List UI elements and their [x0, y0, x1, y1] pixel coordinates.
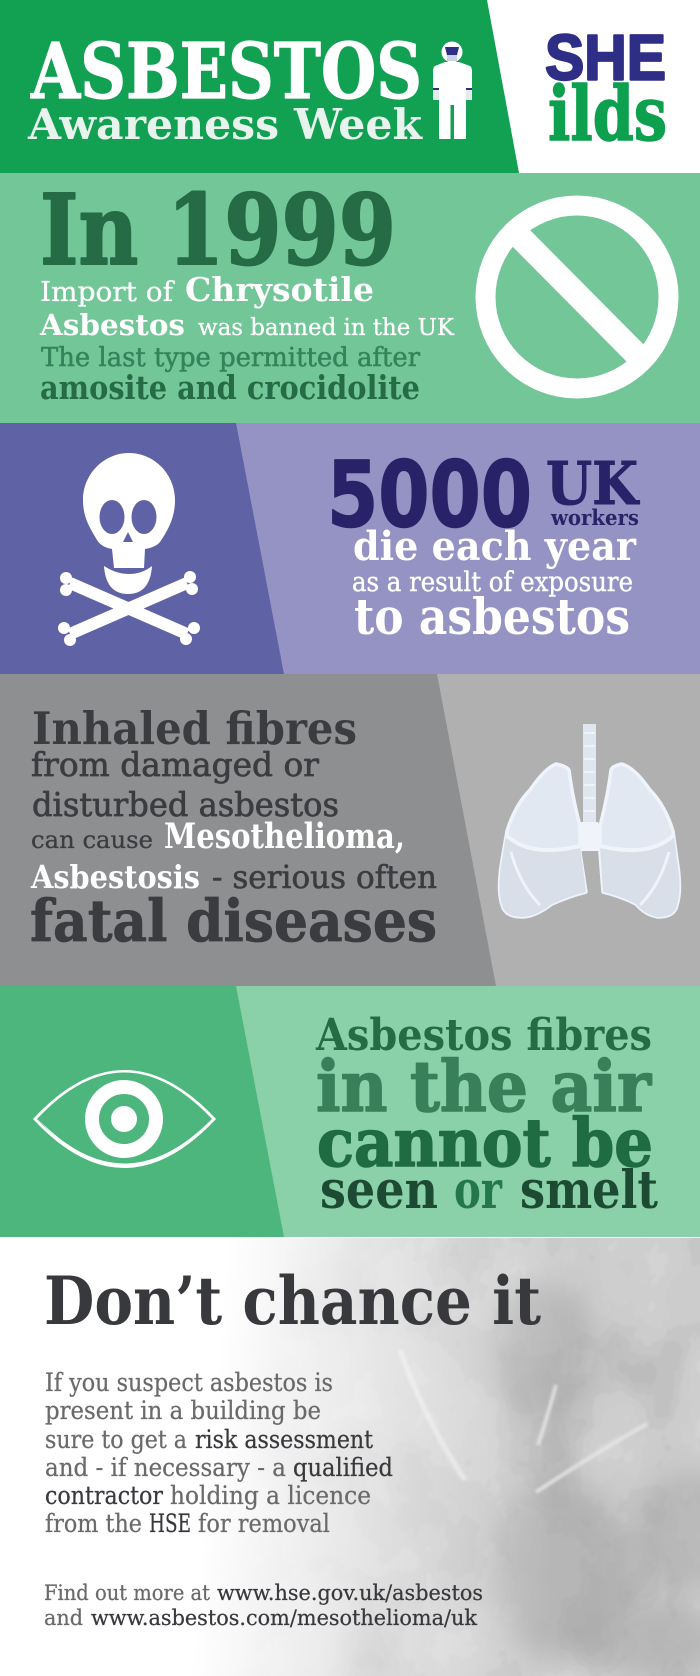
text: risk advice: and - if necessary - a — [45, 1453, 286, 1482]
panel: fibres cannot be seen — [0, 986, 700, 1237]
text: import of chrysotile: Asbestos — [39, 308, 185, 342]
stat: 5000: 5000 — [327, 443, 532, 548]
text: risk advice: qualified — [293, 1453, 393, 1482]
text: find out more links: and — [44, 1606, 83, 1630]
text: import of chrysotile — [39, 270, 455, 342]
text: inhaled fibres: Asbestosis — [30, 858, 200, 896]
text: asbestos fibres in the air: smelt — [520, 1160, 658, 1221]
icon: prohibition sign — [486, 206, 668, 388]
text: inhaled fibres — [30, 702, 437, 955]
text: risk advice: present in a building be — [45, 1396, 321, 1425]
subtitle: Awareness Week: Awareness Week — [27, 100, 423, 149]
title: Asbestos: ASBESTOS — [30, 27, 422, 117]
text: die each year — [352, 523, 637, 646]
icon: lungs — [500, 724, 680, 917]
text: asbestos fibres in the air: cannot be — [317, 1104, 653, 1182]
heading: In 1999: In 1999 — [40, 173, 396, 287]
label: UK workers: workers — [550, 505, 639, 530]
text: inhaled fibres: Mesothelioma, — [164, 816, 405, 857]
text: find out more links: Find out more at — [44, 1581, 211, 1605]
logo: SHEilds: ilds — [548, 70, 667, 158]
panel: header — [0, 0, 700, 173]
panel: 5000 workers — [0, 423, 700, 674]
heading: don't chance it: Don’t chance it — [44, 1262, 541, 1340]
text: risk advice — [45, 1368, 393, 1538]
logo: SHEilds — [545, 22, 667, 158]
background: asbestos fibre texture — [238, 1238, 700, 1676]
text: asbestos fibres in the air: seen — [320, 1160, 438, 1221]
text: die each year: as a result of exposure — [352, 567, 633, 598]
icon: person in protective suit — [433, 42, 472, 139]
icon: skull and crossbones — [58, 453, 200, 646]
text: risk advice: sure to get a — [45, 1425, 187, 1454]
text: amosite and crocidolite: amosite and crocidolite — [40, 368, 420, 407]
text: asbestos fibres in the air: Asbestos fibres — [315, 1010, 652, 1061]
panel: 1999 ban — [0, 173, 700, 423]
text: risk advice: from the — [45, 1509, 142, 1538]
text: asbestos fibres in the air: in the air — [316, 1045, 652, 1128]
text: risk advice: HSE — [149, 1509, 191, 1538]
text: find out more links — [44, 1581, 483, 1630]
text: import of chrysotile: Chrysotile — [185, 270, 374, 309]
text: inhaled fibres: from damaged or — [31, 745, 319, 784]
text: find out more links: www.asbestos.com/mesothelioma/uk — [91, 1606, 477, 1630]
icon: eye — [33, 1070, 216, 1168]
logo: SHEilds: SHE — [545, 22, 666, 94]
text: import of chrysotile: Import of — [40, 277, 175, 308]
text: asbestos fibres in the air: or — [454, 1160, 502, 1221]
text: risk advice: If you suspect asbestos is — [45, 1368, 333, 1397]
text: risk advice: holding a licence — [170, 1481, 371, 1510]
text: inhaled fibres: - serious often — [212, 858, 437, 896]
text: asbestos fibres in the air — [315, 1010, 658, 1221]
text: risk advice: for removal — [198, 1509, 330, 1538]
text: inhaled fibres: disturbed asbestos — [32, 785, 339, 824]
label: UK workers: UK — [546, 449, 640, 518]
panel: don't chance it — [44, 1238, 700, 1676]
text: inhaled fibres: can cause — [31, 826, 153, 854]
text: die each year: die each year — [353, 523, 637, 570]
text: import of chrysotile: was banned in the UK — [198, 315, 455, 341]
text: last type permitted: The last type permitted after — [41, 343, 421, 373]
text: inhaled fibres: Inhaled fibres — [32, 702, 357, 755]
text: risk advice: contractor — [45, 1481, 163, 1510]
text: inhaled fibres: fatal diseases — [30, 887, 437, 955]
text: risk advice: risk assessment — [195, 1425, 373, 1454]
panel: inhaled fibres — [0, 674, 700, 986]
text: die each year: to asbestos — [354, 587, 630, 646]
text: find out more links: www.hse.gov.uk/asbestos — [217, 1581, 483, 1605]
